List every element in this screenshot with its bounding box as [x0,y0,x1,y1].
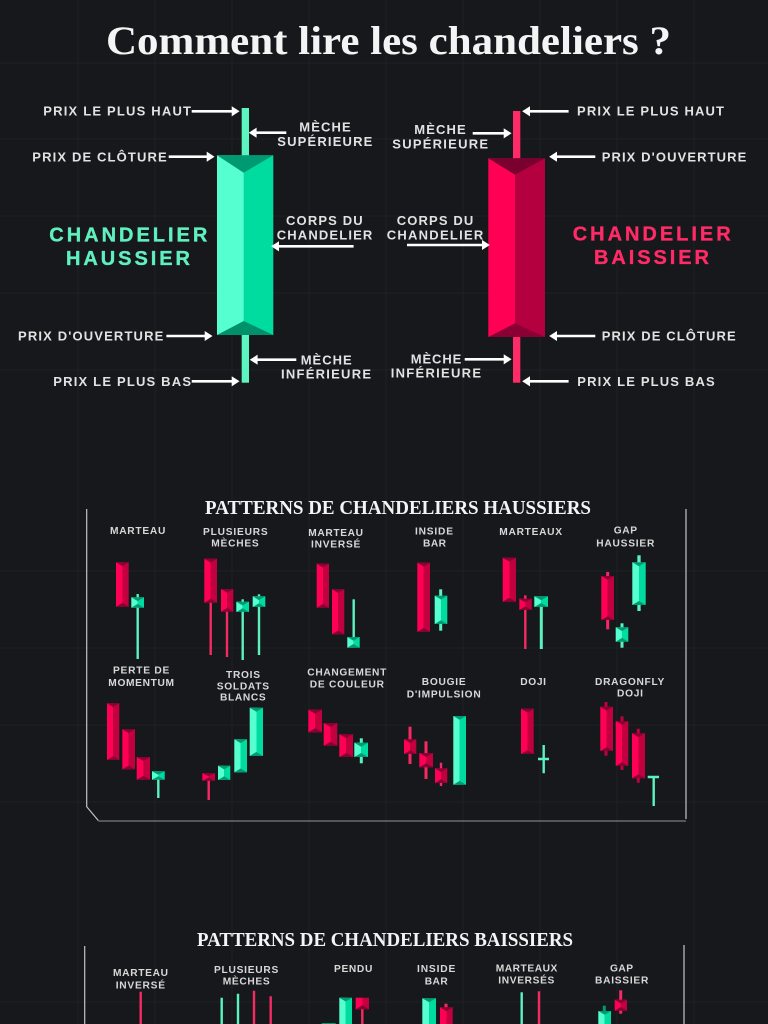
label: mèche inférieure: MÈCHE [301,352,352,367]
label: mèche inférieure: INFÉRIEURE [391,365,481,380]
label: mèche supérieure [392,122,488,151]
pattern: inside bar: INSIDE [415,526,453,537]
panel: chandelier baissier [387,103,747,389]
pattern: marteaux inversés: INVERSÉS [498,973,555,986]
label: mèche inférieure [281,352,371,381]
pattern: gap baissier [595,964,649,1024]
label: corps du chandelier: CHANDELIER [387,228,484,243]
label: mèche inférieure: MÈCHE [411,351,462,366]
pattern: marteau inversé: INVERSÉ [311,537,361,550]
pattern: gap haussier: GAP [614,526,637,537]
arrow: mèche inférieure [250,355,296,364]
pattern: marteaux inversés [496,964,558,1024]
pattern: trois soldats blancs: TROIS [226,670,260,681]
pattern: gap baissier: GAP [610,964,633,975]
panel: patterns haussiers [87,497,686,821]
arrow: corps du chandelier [407,240,489,250]
pattern: marteau: MARTEAU [110,526,165,537]
title: Comment lire les chandeliers ? [106,18,671,63]
pattern: plusieurs mèches: MÈCHES [223,974,270,987]
pattern: inside bar: BAR [425,976,448,987]
label: corps du chandelier: CHANDELIER [277,228,373,243]
pattern: changement de couleur: CHANGEMENT [307,668,387,679]
label: prix d'ouverture: PRIX D'OUVERTURE [602,149,747,164]
pattern: marteau inversé: INVERSÉ [116,978,165,991]
pattern: plusieurs mèches: PLUSIEURS [203,527,268,538]
pattern: inside bar: INSIDE [417,964,456,975]
label: mèche supérieure: MÈCHE [414,122,466,137]
label: prix de clôture: PRIX DE CLÔTURE [32,149,167,164]
heading: chandelier haussier [49,225,208,270]
pattern: plusieurs mèches [214,965,279,1024]
pattern: trois soldats blancs: BLANCS [220,692,266,703]
pattern: pendu [322,964,372,1024]
heading: chandelier baissier: CHANDELIER [573,224,731,246]
arrow: prix d'ouverture [550,152,595,161]
pattern: gap haussier [596,526,655,648]
pattern: bougie d'impulsion: BOUGIE [422,677,466,688]
pattern: dragonfly doji [595,677,665,806]
label: corps du chandelier: CORPS DU [397,213,473,228]
label: prix le plus bas: PRIX LE PLUS BAS [53,374,191,389]
pattern: perte de momentum [107,666,174,798]
arrow: mèche inférieure [465,355,511,364]
label: prix le plus bas: PRIX LE PLUS BAS [577,374,715,389]
arrow: prix de clôture [550,332,595,340]
heading: chandelier haussier: CHANDELIER [49,225,208,247]
heading: patterns baissiers: PATTERNS DE CHANDELIERS BAISSIERS [197,929,573,951]
label: mèche supérieure: SUPÉRIEURE [277,134,373,149]
heading: chandelier baissier [573,224,731,269]
label: prix de clôture: PRIX DE CLÔTURE [602,329,736,344]
candle: bearish [488,111,545,383]
label: corps du chandelier: CORPS DU [286,213,363,228]
label: mèche inférieure [391,351,481,380]
arrow: prix le plus bas [192,377,239,386]
pattern: marteau inversé: MARTEAU [308,528,363,539]
pattern: changement de couleur: DE COULEUR [310,679,385,690]
pattern: trois soldats blancs [202,670,269,800]
pattern: inside bar: BAR [423,538,447,549]
label: prix le plus haut: PRIX LE PLUS HAUT [577,103,724,118]
panel: chandelier haussier [18,103,373,389]
pattern: trois soldats blancs: SOLDATS [217,681,269,692]
pattern: bougie d'impulsion [404,677,481,786]
pattern: plusieurs mèches: MÈCHES [211,536,259,549]
pattern: marteau inversé: MARTEAU [113,968,168,979]
arrow: corps du chandelier [272,242,353,251]
pattern: pendu: PENDU [334,964,372,975]
pattern: marteaux [499,527,562,649]
pattern: doji: DOJI [520,677,546,688]
pattern: gap haussier: HAUSSIER [596,538,655,549]
arrow: prix d'ouverture [167,332,212,340]
label: mèche supérieure: MÈCHE [299,120,351,135]
label: prix le plus haut: PRIX LE PLUS HAUT [43,103,191,118]
pattern: dragonfly doji: DOJI [617,689,643,700]
pattern: plusieurs mèches [203,527,268,660]
pattern: marteau [110,526,165,659]
arrow: mèche supérieure [473,129,511,138]
arrow: mèche supérieure [249,128,286,137]
arrow: prix le plus bas [523,377,568,386]
label: mèche inférieure: INFÉRIEURE [281,366,371,381]
heading: patterns haussiers: PATTERNS DE CHANDELIERS HAUSSIERS [205,497,591,519]
pattern: marteaux: MARTEAUX [499,527,562,538]
pattern: inside bar [415,526,453,632]
pattern: marteau inversé [113,968,168,1024]
candle: bullish [217,108,273,383]
heading: chandelier baissier: BAISSIER [594,247,710,269]
pattern: plusieurs mèches: PLUSIEURS [214,965,279,976]
pattern: bougie d'impulsion: D'IMPULSION [407,689,481,700]
pattern: marteau inversé [308,528,363,648]
panel: patterns baissiers [85,929,684,1024]
label: mèche supérieure [277,120,373,149]
pattern: dragonfly doji: DRAGONFLY [595,677,665,688]
heading: chandelier haussier: HAUSSIER [66,248,191,270]
pattern: inside bar [417,964,456,1024]
label: mèche supérieure: SUPÉRIEURE [392,136,488,151]
label: prix d'ouverture: PRIX D'OUVERTURE [18,329,164,344]
pattern: doji [520,677,549,773]
label: corps du chandelier [277,213,373,243]
pattern: marteaux inversés: MARTEAUX [496,964,558,975]
arrow: prix de clôture [169,152,214,161]
pattern: changement de couleur [307,668,387,763]
arrow: prix le plus haut [192,107,239,116]
label: corps du chandelier [387,213,484,243]
pattern: perte de momentum: MOMENTUM [108,678,174,689]
arrow: prix le plus haut [523,107,568,116]
pattern: gap baissier: BAISSIER [595,975,649,986]
frame [87,509,686,821]
pattern: perte de momentum: PERTE DE [113,666,170,677]
frame [85,945,684,1024]
